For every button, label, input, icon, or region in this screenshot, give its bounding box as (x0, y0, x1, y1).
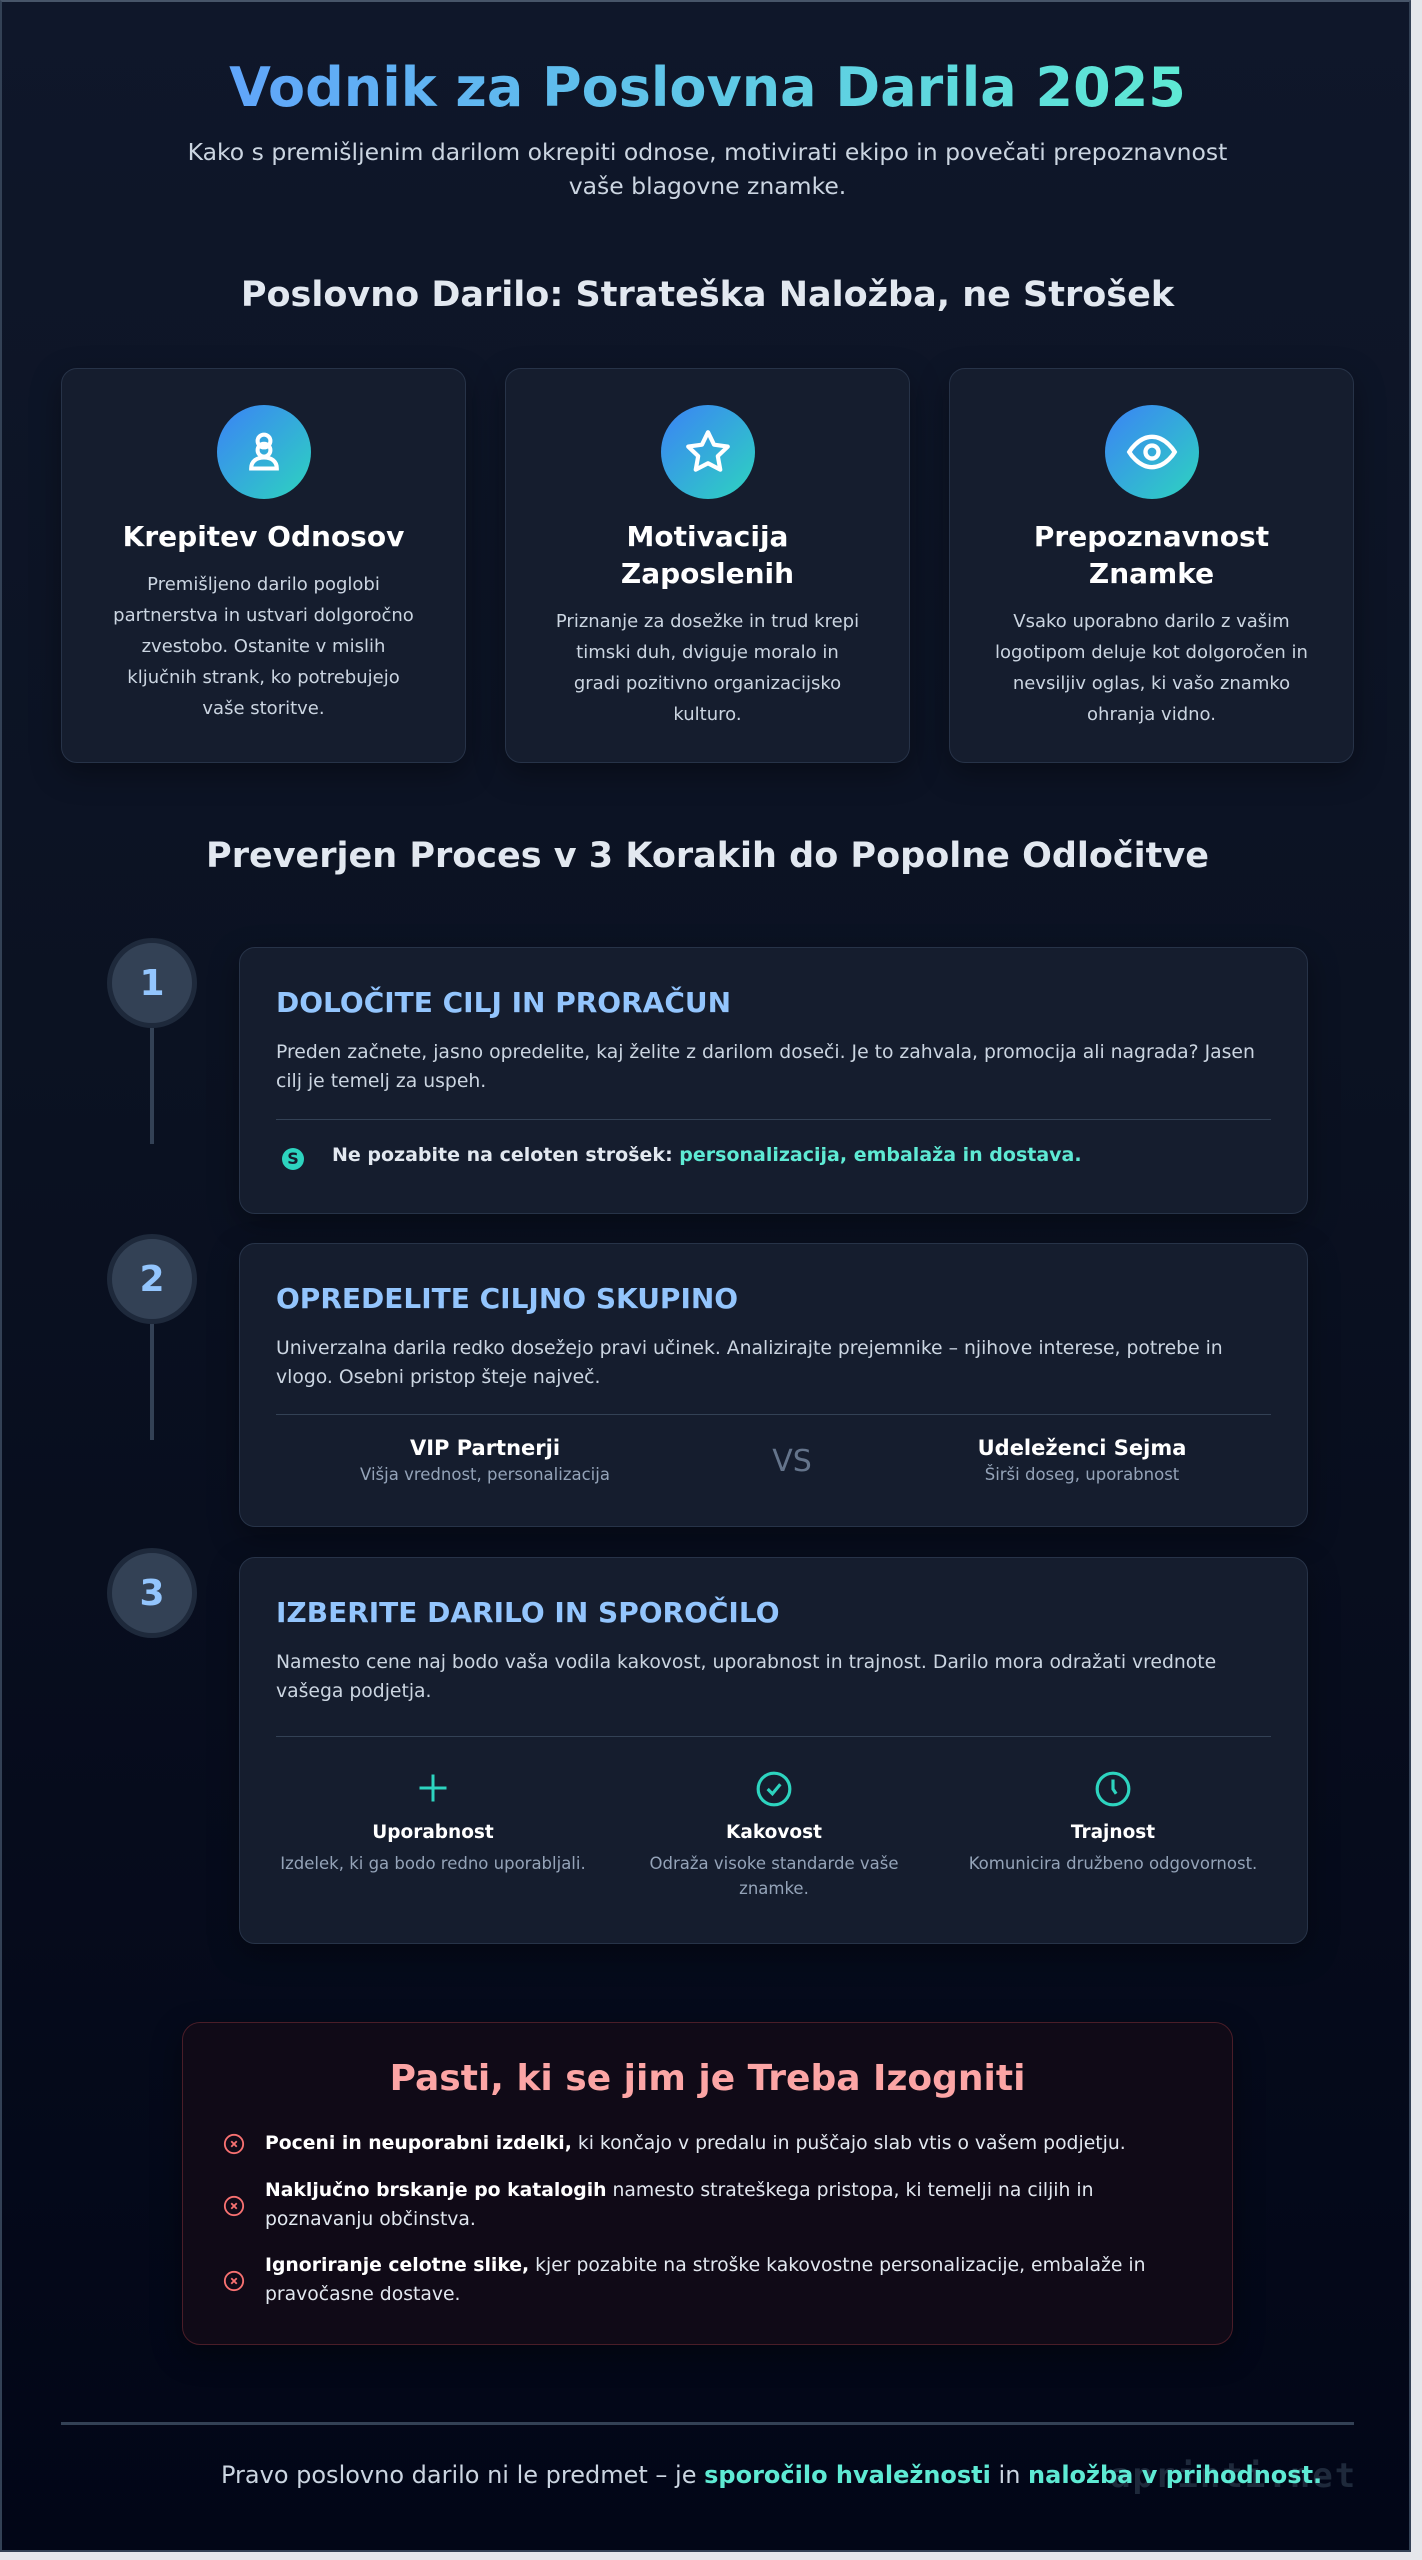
criterion: quality: Kakovost (726, 1822, 822, 1843)
criterion: quality (650, 1772, 898, 1898)
icon: person (217, 405, 311, 499)
footer text: Pravo poslovno darilo ni le predmet – je sporočilo hvaležnosti in naložba v prihodnost. (221, 2461, 1322, 2489)
criterion: usability: Uporabnost (372, 1822, 494, 1843)
title: Vodnik za Poslovna Darila 2025 (229, 56, 1186, 119)
heading: Zaposlenih (621, 557, 794, 590)
step card 3 (239, 1557, 1308, 1944)
criterion: sustainability: Komunicira družbeno odgovornost. (969, 1854, 1257, 1873)
text: Namesto cene naj bodo vaša vodila kakovost, uporabnost in trajnost. Darilo mora odražati vrednote vašega podjetja. (276, 1652, 1216, 1702)
step marker 1: 1 (139, 962, 165, 1004)
tip: Ne pozabite na celoten strošek: personalizacija, embalaža in dostava. (332, 1144, 1082, 1166)
comparison: VIP (360, 1436, 610, 1484)
criterion: usability (280, 1774, 586, 1873)
heading (621, 520, 794, 590)
comparison: fair: Širši doseg, uporabnost (985, 1465, 1179, 1484)
step marker 1 (107, 938, 197, 1028)
criterion: sustainability (969, 1772, 1257, 1873)
heading: IZBERITE DARILO IN SPOROČILO (276, 1596, 780, 1629)
subtitle: Kako s premišljenim darilom okrepiti odnose, motivirati ekipo in povečati prepoznavnost vaše blagovne znamke. (188, 138, 1227, 200)
pitfall 1: Poceni in neuporabni izdelki, ki končajo v predalu in puščajo slab vtis o vašem podjetju. (265, 2133, 1126, 2154)
panel: pitfalls (182, 2022, 1233, 2345)
heading: OPREDELITE CILJNO SKUPINO (276, 1282, 738, 1315)
step card 1 (239, 947, 1308, 1214)
heading (1034, 520, 1269, 590)
pitfall 2: Naključno brskanje po katalogih namesto strateškega pristopa, ki temelji na ciljih in poznavanju občinstva. (265, 2180, 1094, 2230)
heading: Prepoznavnost (1034, 520, 1269, 553)
text: Vsako uporabno darilo z vašim logotipom deluje kot dolgoročen in nevsiljiv oglas, ki vašo znamko ohranja vidno. (995, 611, 1308, 725)
criterion: sustainability: Trajnost (1071, 1822, 1155, 1843)
text: Premišljeno darilo poglobi partnerstva in ustvari dolgoročno zvestobo. Ostanite v mislih ključnih strank, ko potrebujejo vaše storitve. (113, 574, 414, 719)
criterion: quality: Odraža visoke standarde vaše znamke. (650, 1854, 898, 1898)
section heading: strategic investment: Poslovno Darilo: Strateška Naložba, ne Strošek (241, 275, 1174, 315)
watermark: aprinti.net (1110, 2456, 1357, 2496)
text: Univerzalna darila redko dosežejo pravi učinek. Analizirajte prejemnike – njihove interese, potrebe in vlogo. Osebni pristop šteje največ. (276, 1338, 1223, 1388)
comparison: VIP: VIP Partnerji (410, 1436, 560, 1460)
step card 2 (239, 1243, 1308, 1527)
vs: VS (772, 1444, 812, 1479)
icon: star (661, 405, 755, 499)
comparison: fair: Udeleženci Sejma (978, 1436, 1186, 1460)
pitfall 3: Ignoriranje celotne slike, kjer pozabite na stroške kakovostne personalizacije, embalaže in pravočasne dostave. (265, 2255, 1146, 2305)
text: Priznanje za dosežke in trud krepi timski duh, dviguje moralo in gradi pozitivno organizacijsko kulturo. (556, 611, 859, 725)
step marker 2: 2 (139, 1258, 165, 1300)
step marker 3: 3 (139, 1572, 165, 1614)
heading: DOLOČITE CILJ IN PRORAČUN (276, 986, 731, 1019)
heading: Krepitev Odnosov (123, 520, 404, 553)
step marker 2 (107, 1234, 197, 1324)
section heading: process: Preverjen Proces v 3 Korakih do Popolne Odločitve (206, 836, 1209, 876)
panel: relationships (61, 368, 466, 763)
heading: Motivacija (627, 520, 788, 553)
criterion: usability: Izdelek, ki ga bodo redno uporabljali. (280, 1854, 586, 1873)
panel: brand recognition (949, 368, 1354, 763)
comparison: VIP: Višja vrednost, personalizacija (360, 1465, 610, 1484)
heading: Pasti, ki se jim je Treba Izogniti (390, 2058, 1025, 2099)
comparison: fair (978, 1436, 1186, 1484)
tip: S (287, 1149, 299, 1168)
step marker 3 (107, 1548, 197, 1638)
heading: Znamke (1089, 557, 1214, 590)
icon: eye (1105, 405, 1199, 499)
panel: motivation (505, 368, 910, 763)
text: Preden začnete, jasno opredelite, kaj želite z darilom doseči. Je to zahvala, promocija ali nagrada? Jasen cilj je temelj za uspeh. (276, 1042, 1255, 1092)
